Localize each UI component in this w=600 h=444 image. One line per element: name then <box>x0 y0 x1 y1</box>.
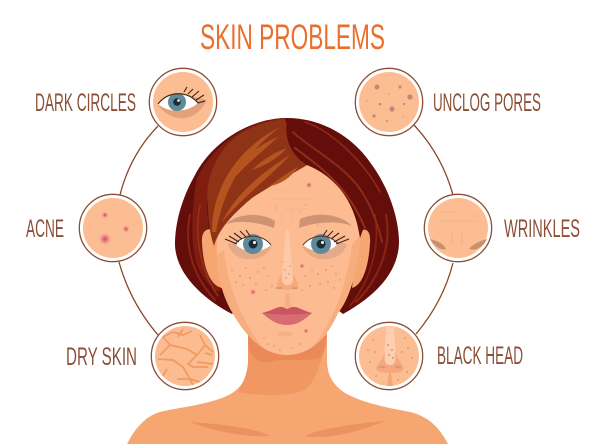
freckles <box>231 204 341 351</box>
eye left <box>225 230 271 254</box>
hair front right <box>286 122 369 238</box>
eyebrow left <box>226 215 275 228</box>
hair front left <box>207 119 307 246</box>
label: black head: BLACK HEAD <box>437 342 523 370</box>
pimples <box>250 182 312 334</box>
dark circle left <box>228 238 272 259</box>
hair back <box>175 118 399 314</box>
eye right <box>303 230 349 254</box>
circle: wrinkles <box>424 194 492 262</box>
circle: acne <box>79 194 147 262</box>
pores <box>366 84 413 122</box>
cracks <box>158 329 213 385</box>
jaw shade left <box>217 250 262 347</box>
circle: unclog pores <box>355 68 423 136</box>
hair band left <box>192 118 285 292</box>
neck shadow <box>238 335 327 395</box>
blackhead dots <box>367 337 413 381</box>
circle: dry skin <box>151 322 219 390</box>
dark circle right <box>302 238 347 259</box>
hair highlights right <box>293 122 382 242</box>
eyebrow right <box>299 215 352 228</box>
hair highlights left <box>212 127 298 232</box>
shoulders and neck <box>127 325 448 444</box>
under-eye patch <box>158 95 207 118</box>
acne spots <box>98 211 130 246</box>
woman portrait <box>127 118 448 444</box>
jaw shade right <box>312 235 360 347</box>
collarbones <box>190 421 384 437</box>
chin highlight <box>277 332 293 336</box>
nose <box>376 327 404 386</box>
face <box>217 165 360 355</box>
nose <box>276 230 298 307</box>
chin shadow <box>248 335 327 362</box>
eye <box>158 87 205 111</box>
title: SKIN PROBLEMS <box>200 18 385 57</box>
hair strands side <box>188 205 388 306</box>
label: dry skin: DRY SKIN <box>66 343 137 371</box>
label: dark circles: DARK CIRCLES <box>35 89 136 117</box>
right ear <box>352 230 370 288</box>
wrinkle lines <box>440 212 480 245</box>
circle: dark circles <box>149 68 217 136</box>
connector arcs <box>119 125 453 335</box>
circle: black head <box>355 322 423 390</box>
label: acne: ACNE <box>26 215 64 243</box>
left ear <box>202 229 222 288</box>
forehead wrinkles <box>268 190 312 222</box>
brows <box>430 239 487 250</box>
lips <box>262 307 312 325</box>
